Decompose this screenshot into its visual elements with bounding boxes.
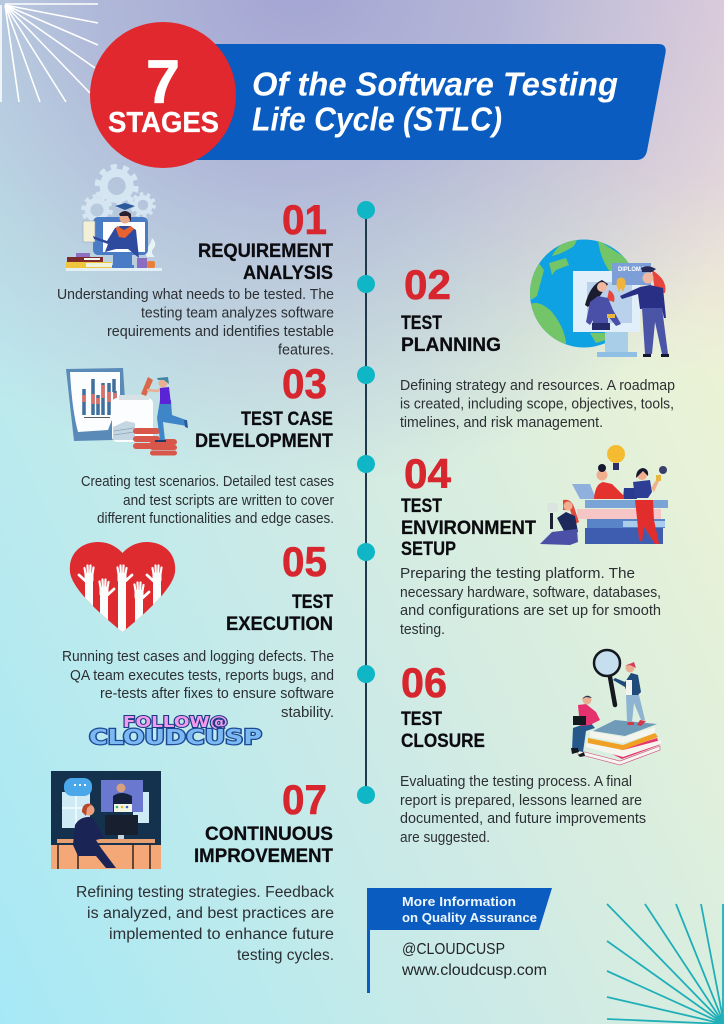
description: Understanding what needs to be tested. The xyxy=(57,287,334,303)
description: timelines, and risk management. xyxy=(400,415,603,431)
icon: globe and diploma xyxy=(528,238,669,357)
description xyxy=(81,474,334,527)
description: testing cycles. xyxy=(237,947,334,964)
description: testing team analyzes software xyxy=(141,306,334,322)
stage 05 xyxy=(62,538,334,721)
description: is created, including scope, objectives, tools, xyxy=(400,396,674,412)
heading xyxy=(195,408,333,452)
description: necessary hardware, software, databases, xyxy=(400,585,661,601)
heading: EXECUTION xyxy=(226,613,333,635)
icon: heart with raised hands xyxy=(70,542,176,632)
description: are suggested. xyxy=(400,830,490,846)
stage 04 xyxy=(400,445,668,638)
description: implemented to enhance future xyxy=(109,926,334,943)
heading: TEST xyxy=(401,495,442,517)
description: and configurations are set up for smooth xyxy=(400,603,661,619)
description: Running test cases and logging defects. The xyxy=(62,649,334,665)
description: report is prepared, lessons learned are xyxy=(400,793,642,809)
heading: TEST xyxy=(401,312,442,334)
icon: chart, jar, coins and runner xyxy=(66,368,188,456)
heading: TEST xyxy=(292,591,333,613)
title text: Of the Software Testing xyxy=(252,66,618,102)
description xyxy=(400,566,661,638)
sunburst bottom right xyxy=(607,904,724,1024)
description: documented, and future improvements xyxy=(400,811,646,827)
footer: more information xyxy=(367,888,552,993)
heading xyxy=(194,823,333,867)
description: Preparing the testing platform. The xyxy=(400,566,635,582)
stage 05: 05 xyxy=(282,538,327,585)
timeline xyxy=(357,201,375,804)
title text: Life Cycle (STLC) xyxy=(252,100,502,138)
icon: magnifier and people on books xyxy=(571,650,661,765)
description xyxy=(400,378,675,431)
stage 07: 07 xyxy=(282,776,327,823)
description: QA team executes tests, reports bugs, and xyxy=(70,668,334,684)
description: Creating test scenarios. Detailed test cases xyxy=(81,474,334,490)
icon: video call at desk xyxy=(51,771,161,869)
heading xyxy=(401,312,501,356)
stage 02 xyxy=(400,238,675,431)
title text xyxy=(252,66,618,138)
red badge: 7 stages xyxy=(90,22,236,168)
heading xyxy=(401,495,536,560)
stage 06: 06 xyxy=(401,659,447,706)
heading: TEST CASE xyxy=(241,408,333,430)
description: features. xyxy=(278,342,334,358)
heading: ENVIRONMENT xyxy=(401,517,536,539)
stage 02: 02 xyxy=(404,261,451,308)
follow cloudcusp logo: CLOUDCUSP xyxy=(89,725,262,749)
heading xyxy=(198,240,333,284)
stage 06 xyxy=(400,650,661,846)
icon: globe and diploma: DIPLOMA xyxy=(618,267,646,273)
footer contact: @CLOUDCUSP xyxy=(402,941,505,958)
description: requirements and identifies testable xyxy=(107,324,334,340)
description xyxy=(400,774,646,846)
heading: IMPROVEMENT xyxy=(194,845,333,867)
icon: graduate with gears xyxy=(66,167,162,271)
stage 03: 03 xyxy=(282,360,327,407)
description: re-tests after fixes to ensure software xyxy=(100,686,334,702)
description xyxy=(57,287,334,358)
description: Evaluating the testing process. A final xyxy=(400,774,632,790)
description: stability. xyxy=(281,705,334,721)
description: Refining testing strategies. Feedback xyxy=(76,884,334,901)
footer flag text: on Quality Assurance xyxy=(402,910,537,925)
heading: REQUIREMENT xyxy=(198,240,333,262)
heading xyxy=(226,591,333,635)
stage 01: 01 xyxy=(282,196,327,243)
stage 04: 04 xyxy=(404,450,452,497)
description xyxy=(76,884,334,964)
heading: CONTINUOUS xyxy=(205,823,333,845)
footer contact xyxy=(401,941,547,979)
heading: ANALYSIS xyxy=(243,262,333,284)
description: different functionalities and edge cases. xyxy=(97,511,334,527)
sunburst top left xyxy=(1,4,98,102)
footer contact: www.cloudcusp.com xyxy=(401,962,547,979)
follow cloudcusp logo: FOLLOW@ xyxy=(123,713,228,731)
stage 07 xyxy=(51,771,334,964)
description: is analyzed, and best practices are xyxy=(87,905,334,922)
footer flag text: More Information xyxy=(402,894,516,909)
red badge: 7 stages: 7 xyxy=(146,48,180,116)
heading xyxy=(401,708,485,752)
footer flag text xyxy=(402,894,537,925)
heading: SETUP xyxy=(401,538,456,560)
stage 03 xyxy=(66,360,334,527)
description: and test scripts are written to cover xyxy=(123,493,334,509)
icon: people on books with lightbulb xyxy=(540,445,668,545)
heading: PLANNING xyxy=(401,334,501,356)
follow cloudcusp logo xyxy=(89,713,262,749)
stage 01 xyxy=(57,167,334,358)
heading: DEVELOPMENT xyxy=(195,430,333,452)
description: Defining strategy and resources. A roadmap xyxy=(400,378,675,394)
description xyxy=(62,649,334,721)
title banner xyxy=(190,44,666,160)
description: testing. xyxy=(400,622,445,638)
heading: CLOSURE xyxy=(401,730,485,752)
heading: TEST xyxy=(401,708,442,730)
red badge: 7 stages: STAGES xyxy=(108,107,219,139)
